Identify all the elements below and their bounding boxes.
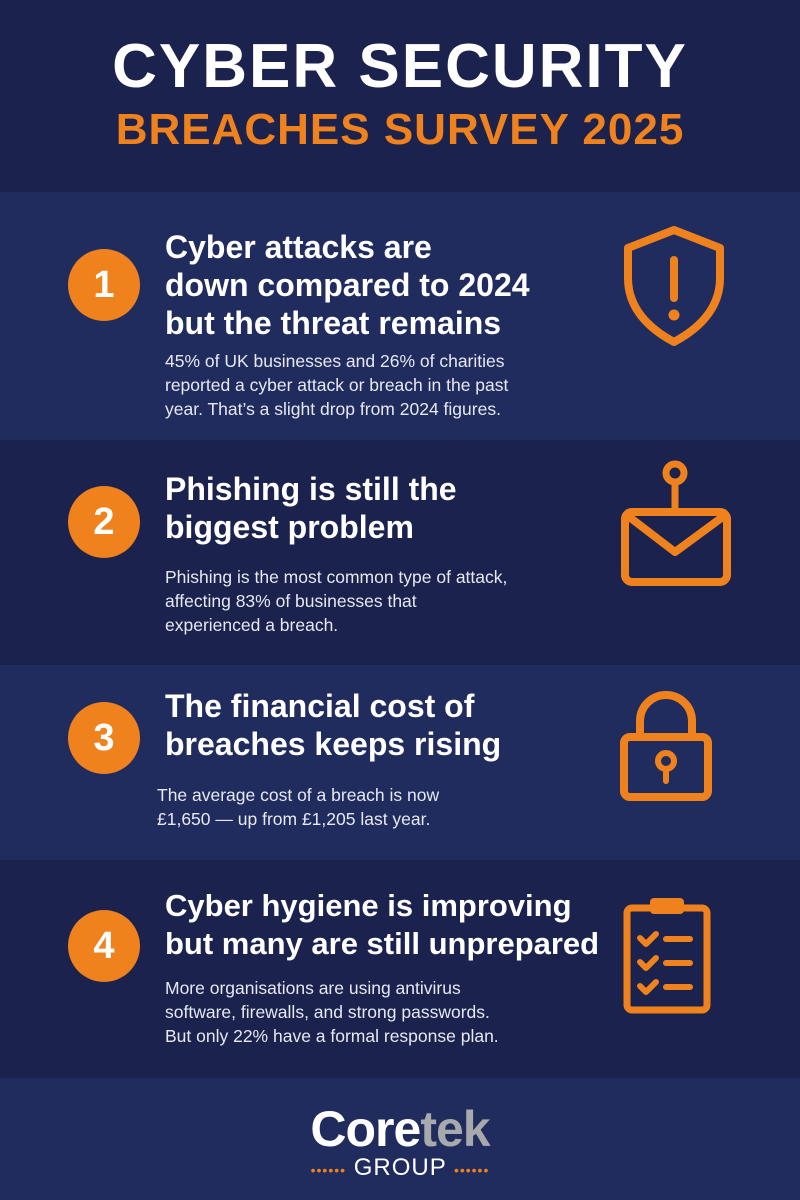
heading 2: biggest problem — [165, 509, 414, 545]
icon: clipboard checklist — [624, 898, 710, 1014]
text 3: The average cost of a breach is now — [157, 785, 439, 805]
heading 1 — [165, 229, 530, 341]
text 4: But only 22% have a formal response plan. — [165, 1026, 499, 1046]
heading 4: Cyber hygiene is improving — [165, 888, 572, 923]
text 1: reported a cyber attack or breach in the past — [165, 375, 508, 395]
text 2 — [165, 567, 507, 635]
heading 3: breaches keeps rising — [165, 726, 501, 762]
number 3: 3 — [93, 717, 115, 759]
text 3: £1,650 — up from £1,205 last year. — [157, 809, 430, 829]
heading 4: but many are still unprepared — [165, 926, 599, 961]
panel: hygiene — [0, 860, 800, 1078]
heading 2: Phishing is still the — [165, 471, 457, 507]
logo: •••••• GROUP •••••• — [311, 1154, 489, 1181]
icon: padlock — [620, 691, 712, 801]
text 2: affecting 83% of businesses that — [165, 591, 417, 611]
footer — [0, 1078, 800, 1200]
heading 4 — [165, 888, 599, 961]
title — [112, 32, 688, 154]
logo: Coretek — [310, 1101, 490, 1157]
heading 1: but the threat remains — [165, 305, 501, 341]
text 4 — [165, 978, 499, 1046]
heading 2 — [165, 471, 457, 545]
text 2: Phishing is the most common type of attack, — [165, 567, 507, 587]
text 2: experienced a breach. — [165, 615, 338, 635]
number 1: 1 — [93, 264, 115, 306]
panel: phishing — [0, 440, 800, 665]
logo — [310, 1101, 490, 1181]
text 1: 45% of UK businesses and 26% of charities — [165, 351, 504, 371]
heading 1: Cyber attacks are — [165, 229, 432, 265]
heading 3: The financial cost of — [165, 688, 474, 724]
number 4 — [68, 910, 140, 982]
icon: envelope with hook — [621, 460, 731, 586]
text 4: More organisations are using antivirus — [165, 978, 461, 998]
heading 1: down compared to 2024 — [165, 267, 530, 303]
text 1 — [165, 351, 508, 419]
text 3 — [157, 785, 440, 829]
header — [0, 0, 800, 192]
number 2 — [68, 486, 140, 558]
panel: cost — [0, 665, 800, 860]
text 4: software, firewalls, and strong passwords. — [165, 1002, 490, 1022]
heading 3 — [165, 688, 501, 762]
text 1: year. That’s a slight drop from 2024 figures. — [165, 399, 501, 419]
number 2: 2 — [93, 501, 115, 543]
panel: attacks down — [0, 192, 800, 440]
title: CYBER SECURITY — [112, 32, 688, 101]
title: BREACHES SURVEY 2025 — [116, 105, 684, 154]
number 3 — [68, 702, 140, 774]
number 4: 4 — [93, 925, 115, 967]
number 1 — [68, 249, 140, 321]
icon: shield — [624, 226, 724, 346]
